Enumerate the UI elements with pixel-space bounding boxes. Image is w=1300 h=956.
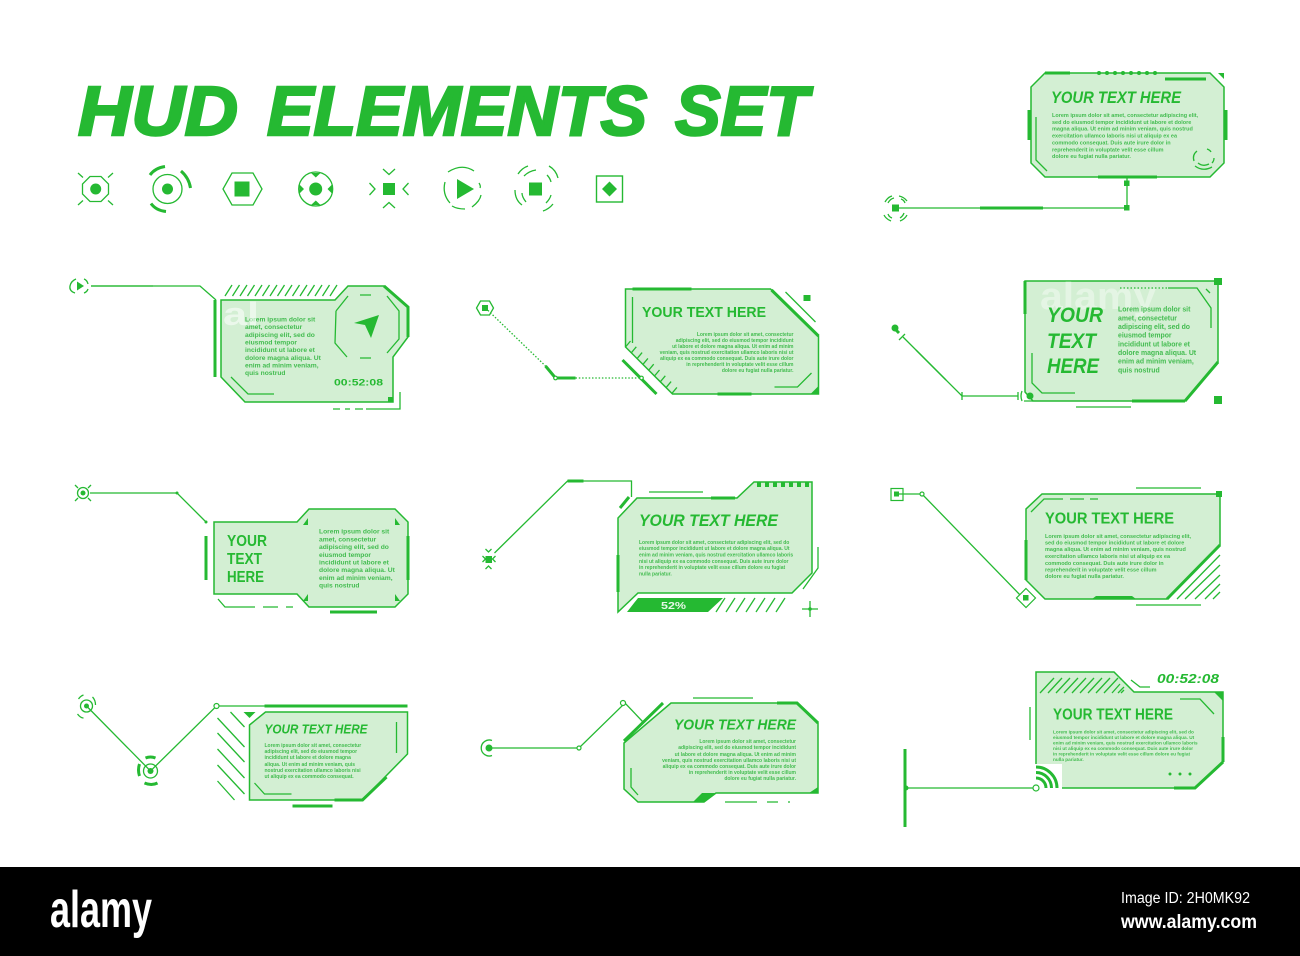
frame group: [622, 289, 818, 394]
triangle marker: [244, 712, 256, 718]
connector: [884, 177, 1130, 221]
dot row: [1097, 71, 1157, 75]
body text: Lorem ipsum dolor sit amet, consectetur: [699, 739, 796, 745]
corner triangles: [303, 518, 400, 601]
panel: stacked heading callout with squares: [892, 276, 1222, 407]
body text: veniam, quis nostrud exercitation ullamco laboris nisi ut: [662, 758, 796, 764]
progress bar: [627, 598, 723, 612]
body text: sed do eiusmod tempor incididunt ut labore et dolore: [1045, 540, 1184, 546]
icon: hexagon square: [223, 173, 262, 205]
connector: [891, 488, 1036, 608]
logo: alamy: [50, 881, 152, 939]
body text: dolore magna aliqua. Ut: [1118, 350, 1197, 357]
body text: magna aliqua. Ut enim ad minim veniam, quis nostrud: [1052, 126, 1193, 132]
body text: dolore eu fugiat nulla pariatur.: [722, 368, 794, 374]
body text: in reprehenderit in voluptate velit esse cillum: [689, 770, 797, 776]
icon: double ring square: [515, 166, 558, 211]
footer band: [0, 867, 1300, 956]
body text: dolore eu fugiat nulla pariatur.: [1052, 154, 1131, 160]
body text: dolore magna aliqua. Ut: [245, 355, 322, 362]
body text: aliqua. Ut enim ad minim veniam, quis: [264, 762, 355, 768]
body text: adipiscing elit, sed do eiusmod tempor incididunt: [676, 338, 794, 344]
body text: ut aliquip ex ea commodo consequat.: [264, 774, 354, 780]
icon: corner radar: [1193, 149, 1214, 169]
body text: Lorem ipsum dolor sit: [319, 528, 390, 536]
dots: [1168, 772, 1192, 776]
body text: incididunt ut labore et: [319, 560, 390, 566]
heading: YOUR TEXT HERE: [264, 722, 368, 736]
inner bracket: [1036, 117, 1047, 171]
connector: [70, 279, 216, 300]
body text: sed do eiusmod tempor incididunt ut labore et dolore: [1052, 120, 1191, 126]
body text: aliquip ex ea commodo consequat. Duis aute irure dolor: [663, 764, 796, 770]
body text: nulla pariatur.: [639, 572, 672, 578]
body text: quis nostrud: [245, 370, 286, 377]
corner triangle: [1218, 73, 1224, 79]
icon row: [78, 166, 622, 212]
body text: amet, consectetur: [319, 536, 377, 544]
body text: incididunt ut labore et: [245, 347, 316, 354]
heading: HERE: [227, 569, 264, 586]
hatch strip: [225, 285, 337, 296]
connector: [476, 301, 643, 380]
heading: YOUR: [227, 533, 267, 550]
inner corner and bracket: [231, 377, 400, 409]
body text: Lorem ipsum dolor sit amet, consectetur adipiscing elit, sed do: [1053, 730, 1194, 734]
body text: enim ad minim veniam, quis nostrud exercitation ullamco laboris: [639, 552, 793, 558]
panel: stacked heading notched callout: [75, 485, 408, 612]
octagon compass frame: [335, 295, 399, 358]
heading: [1047, 303, 1103, 378]
panel: dotted callout: [476, 289, 818, 394]
timer: 00:52:08: [334, 378, 383, 388]
body text: Lorem ipsum dolor sit amet, consectetur: [264, 743, 361, 749]
body text: quis nostrud: [1118, 368, 1160, 374]
watermark: al: [223, 296, 259, 332]
body text: enim ad minim veniam,: [319, 575, 393, 582]
body text: Lorem ipsum dolor sit amet, consectetur adipiscing elit, sed do: [639, 540, 789, 546]
heading: YOUR TEXT HERE: [642, 304, 766, 321]
body text: amet, consectetur: [1118, 316, 1177, 322]
body text: quis nostrud: [319, 582, 360, 590]
panel: top right callout: [884, 71, 1226, 221]
body text: in reprehenderit in voluptate velit esse cillum: [686, 362, 794, 368]
body text: nisi ut aliquip ex ea commodo consequat. Duis aute irure dolor: [1053, 746, 1193, 751]
icon: diamond in square: [596, 176, 622, 202]
heading: YOUR TEXT HERE: [1053, 706, 1173, 724]
icon: square with chevrons: [370, 169, 408, 208]
heading: TEXT: [227, 551, 262, 568]
connector: [481, 700, 643, 756]
heading: TEXT: [1047, 329, 1098, 353]
crosshair: [802, 601, 818, 617]
body text: eiusmod tempor: [319, 552, 371, 559]
body text: dolore eu fugiat nulla pariatur.: [1045, 574, 1124, 580]
hatch strip: [1177, 555, 1220, 599]
connector: [904, 749, 1039, 827]
body text: Lorem ipsum dolor sit amet, consectetur adipiscing elit,: [1052, 113, 1199, 119]
body text: incididunt ut labore et: [1118, 342, 1191, 348]
body text: amet, consectetur: [245, 324, 303, 331]
body text: incididunt ut labore et dolore magna: [264, 755, 351, 761]
body text: ut labore et dolore magna aliqua. Ut enim ad minim: [675, 752, 797, 758]
hatch strip: [1040, 678, 1124, 693]
body text: Lorem ipsum dolor sit: [245, 316, 316, 324]
panel: progress callout: [482, 481, 818, 617]
body text: Lorem ipsum dolor sit amet, consectetur: [697, 332, 794, 338]
panel: diagonal connector callout: [891, 488, 1222, 608]
heading: [227, 533, 267, 586]
body text: Lorem ipsum dolor sit: [1118, 306, 1191, 314]
body text: magna aliqua. Ut enim ad minim veniam, quis nostrud: [1045, 547, 1186, 553]
body text: eiusmod tempor incididunt ut labore et dolore magna aliqua. Ut: [1053, 735, 1195, 740]
frame accents: [624, 703, 818, 741]
timer: 00:52:08: [1157, 671, 1220, 686]
heading: YOUR TEXT HERE: [639, 512, 779, 530]
frame accents: [1174, 737, 1223, 788]
body text: nulla pariatur.: [1053, 757, 1084, 762]
body text: reprehenderit in voluptate velit esse cillum: [1045, 568, 1157, 574]
body text: in reprehenderit in voluptate velit esse cillum dolore eu fugiat: [1053, 752, 1190, 756]
body text: adipiscing elit, sed do eiusmod tempor: [264, 749, 357, 755]
body text: nostrud exercitation ullamco laboris nisi: [264, 768, 361, 774]
connector: [892, 324, 1034, 401]
body text: enim ad minim veniam, quis nostrud exercitation ullamco laboris: [1053, 740, 1198, 746]
heading: YOUR TEXT HERE: [1051, 89, 1182, 107]
connector: [78, 695, 408, 784]
frame group: [618, 482, 818, 612]
body text: ut labore et dolore magna aliqua. Ut enim ad minim: [672, 344, 794, 350]
icon: ring with four triangles: [299, 172, 333, 206]
frame accents: [334, 777, 386, 800]
hatch strip: [716, 598, 785, 612]
panel: hatched left callout: [78, 695, 408, 806]
heading: YOUR: [1047, 303, 1103, 327]
panel: stepped bottom callout: [481, 698, 818, 802]
icon: ring target: [150, 166, 190, 212]
heading: HERE: [1047, 354, 1100, 378]
body text: commodo consequat. Duis aute irure dolor in: [1045, 561, 1164, 567]
icon: wifi arcs: [1032, 764, 1062, 790]
body text: adipiscing elit, sed do: [319, 544, 389, 551]
icon: play ring: [444, 167, 481, 209]
body text: exercitation ullamco laboris nisi ut aliquip ex ea: [1045, 554, 1171, 560]
frame accents: [1026, 540, 1220, 599]
panel: wifi timer callout: [904, 671, 1223, 827]
body text: Lorem ipsum dolor sit amet, consectetur adipiscing elit,: [1045, 534, 1192, 540]
icon: compass arrow: [354, 315, 379, 338]
url: www.alamy.com: [1120, 912, 1257, 933]
hatch strip: [218, 712, 244, 800]
body text: adipiscing elit, sed do eiusmod tempor incididunt: [678, 745, 796, 751]
heading: YOUR TEXT HERE: [1045, 510, 1174, 528]
body text: dolore eu fugiat nulla pariatur.: [724, 776, 797, 782]
body text: aliquip ex ea commodo consequat. Duis aute irure dolor: [660, 356, 794, 362]
title: ELEMENTS: [267, 72, 647, 150]
frame accents: [215, 286, 408, 377]
connector: [75, 485, 208, 524]
image id: Image ID: 2H0MK92: [1121, 890, 1250, 907]
corner squares: [1214, 278, 1222, 285]
icon: octagon target: [78, 173, 113, 205]
body text: adipiscing elit, sed do: [245, 332, 315, 339]
connector: [482, 481, 632, 569]
body text: eiusmod tempor incididunt ut labore et dolore magna aliqua. Ut: [639, 546, 790, 552]
body text: eiusmod tempor: [245, 340, 297, 346]
body text: nisi ut aliquip ex ea commodo consequat. Duis aute irure dolor: [639, 559, 789, 565]
body text: veniam, quis nostrud exercitation ullamco laboris nisi ut: [660, 350, 794, 356]
frame accents: [1025, 281, 1218, 401]
body text: exercitation ullamco laboris nisi ut aliquip ex ea: [1052, 134, 1178, 140]
body text: reprehenderit in voluptate velit esse cillum: [1052, 148, 1164, 154]
watermark: alamy: [1040, 276, 1156, 318]
body text: dolore magna aliqua. Ut: [319, 567, 396, 574]
title: [78, 72, 813, 150]
body text: enim ad minim veniam,: [245, 362, 319, 370]
body text: enim ad minim veniam,: [1118, 358, 1194, 366]
frame accents: [1029, 73, 1226, 177]
body text: eiusmod tempor: [1118, 332, 1172, 340]
panel: compass callout: [70, 279, 408, 409]
frame accents: [206, 536, 408, 580]
title: SET: [675, 72, 813, 150]
title: HUD: [78, 72, 238, 150]
heading: YOUR TEXT HERE: [674, 716, 797, 734]
progress bar: 52%: [661, 600, 687, 612]
body text: in reprehenderit in voluptate velit esse cillum dolore eu fugiat: [639, 565, 785, 571]
body text: commodo consequat. Duis aute irure dolor in: [1052, 140, 1171, 146]
body text: adipiscing elit, sed do: [1118, 324, 1190, 331]
